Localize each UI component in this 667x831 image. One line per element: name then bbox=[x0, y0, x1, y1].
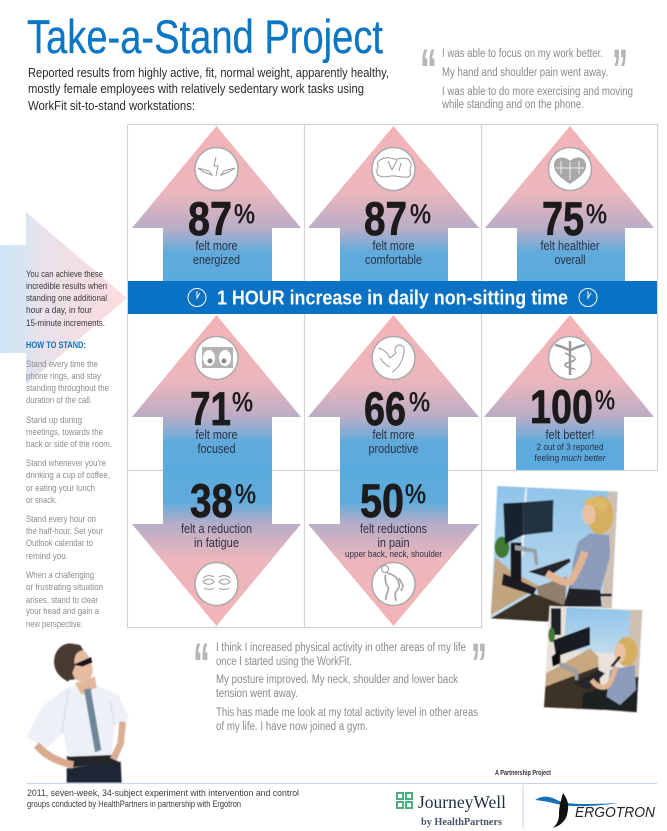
bottom quote: once I started using the WorkFit. bbox=[216, 656, 352, 668]
label: felt healthier bbox=[540, 238, 600, 253]
icon: clock left bbox=[188, 288, 206, 306]
footer rule bbox=[27, 782, 657, 784]
stat: % bbox=[232, 387, 253, 417]
side tips: duration of the call. bbox=[26, 395, 92, 406]
side tips: drinking a cup of coffee, bbox=[26, 470, 110, 481]
footer note: 2011, seven-week, 34-subject experiment with intervention and control bbox=[27, 788, 299, 799]
side tips: new perspective. bbox=[26, 619, 83, 630]
top quote: “ bbox=[420, 38, 437, 103]
stat: % bbox=[595, 385, 615, 415]
side tips: your head and gain a bbox=[26, 606, 100, 617]
top quote: My hand and shoulder pain went away. bbox=[442, 67, 608, 79]
label: energized bbox=[193, 252, 240, 267]
label: felt more bbox=[372, 238, 414, 253]
label: in fatigue bbox=[194, 535, 239, 550]
panel: left arrow bbox=[0, 212, 127, 385]
stat: 87 bbox=[188, 192, 232, 245]
photo: man looking up bbox=[27, 643, 129, 783]
side tips: When a challenging bbox=[26, 570, 94, 581]
label bbox=[345, 521, 442, 560]
stat: % bbox=[405, 479, 426, 509]
logo: Ergotron bbox=[535, 793, 655, 828]
partnership label: A Partnership Project bbox=[495, 770, 552, 777]
label bbox=[181, 521, 252, 550]
side text: intro: incredible results when bbox=[26, 281, 107, 292]
banner bbox=[128, 281, 657, 314]
side text: intro bbox=[26, 269, 107, 329]
label bbox=[368, 427, 418, 456]
side text: intro: standing one additional bbox=[26, 293, 107, 304]
title: Take-a-Stand Project bbox=[27, 10, 383, 63]
bottom quote: “ bbox=[193, 632, 210, 697]
stat: 75 bbox=[542, 192, 584, 245]
arrow: healthier bbox=[485, 126, 654, 281]
results grid bbox=[128, 124, 658, 628]
label: felt reductions bbox=[360, 521, 427, 536]
icon: caduceus bbox=[548, 336, 592, 380]
icon: JourneyWell mark bbox=[396, 792, 413, 809]
label bbox=[365, 238, 422, 267]
stat: 87 bbox=[364, 192, 407, 245]
label: felt more bbox=[196, 238, 238, 253]
label bbox=[534, 427, 606, 464]
icon: heart bbox=[548, 148, 592, 190]
side text: intro: 15-minute increments. bbox=[26, 318, 105, 329]
arrow: energized bbox=[132, 126, 301, 281]
side tips: phone rings, and stay bbox=[26, 371, 101, 382]
intro text: WorkFit sit-to-stand workstations: bbox=[28, 99, 195, 113]
bottom quote: tension went away. bbox=[216, 688, 298, 700]
banner text: 1 HOUR increase in daily non-sitting time bbox=[217, 288, 568, 310]
label: overall bbox=[554, 252, 586, 267]
side text: intro: hour a day, in four bbox=[26, 305, 92, 316]
icon: muscle arm bbox=[372, 336, 415, 380]
intro text: mostly female employees with relatively sedentary work tasks using bbox=[28, 82, 364, 96]
stat: 100 bbox=[530, 380, 593, 433]
side tips: or eating your lunch bbox=[26, 483, 95, 494]
side tips: arises, stand to clear bbox=[26, 595, 98, 606]
icon: back pain figure bbox=[372, 562, 415, 606]
side tips: or frustrating situation bbox=[26, 582, 103, 593]
side tips: Stand every hour on bbox=[26, 514, 96, 525]
arrow: felt better bbox=[484, 315, 654, 470]
bottom quote: of my life. I have now joined a gym. bbox=[216, 721, 368, 733]
stat: % bbox=[234, 199, 255, 229]
divider bbox=[522, 785, 524, 828]
label: felt a reduction bbox=[181, 521, 252, 536]
side tips: Stand whenever you're bbox=[26, 458, 106, 469]
logo: JourneyWell: JourneyWell bbox=[418, 792, 506, 812]
intro text: Reported results from highly active, fit, normal weight, apparently healthy, bbox=[28, 66, 389, 80]
top quote: ” bbox=[612, 38, 628, 103]
side tips: or snack. bbox=[26, 495, 57, 506]
top quote: I was able to focus on my work better. bbox=[442, 48, 603, 60]
label: felt better! bbox=[546, 427, 594, 442]
footer note bbox=[27, 788, 299, 810]
side tips: standing throughout the bbox=[26, 383, 109, 394]
stat: % bbox=[410, 199, 431, 229]
bottom quote: My posture improved. My neck, shoulder and lower back bbox=[216, 674, 458, 686]
icon: energy bolts bbox=[195, 148, 238, 190]
side heading: HOW TO STAND: bbox=[26, 340, 86, 351]
side tips: the half-hour. Set your bbox=[26, 526, 103, 537]
label: 2 out of 3 reported bbox=[536, 442, 604, 453]
stat: 38 bbox=[190, 474, 233, 527]
arrow: productive and pain bbox=[308, 315, 479, 626]
label: focused bbox=[198, 441, 236, 456]
side tips: Stand up during bbox=[26, 415, 82, 426]
label: felt more bbox=[372, 427, 414, 442]
label: feeling much better bbox=[534, 453, 606, 464]
stat: % bbox=[586, 199, 607, 229]
label bbox=[193, 238, 240, 267]
icon: focused eyes bbox=[195, 336, 238, 380]
side tips: meetings, towards the bbox=[26, 427, 103, 438]
logo: JourneyWell bbox=[396, 792, 506, 828]
top quote bbox=[420, 38, 633, 111]
bottom quote bbox=[193, 632, 487, 733]
side tips: back or side of the room. bbox=[26, 439, 112, 450]
logo: JourneyWell: by HealthPartners bbox=[421, 816, 503, 828]
photo: woman seated bbox=[544, 606, 642, 712]
icon: clock right bbox=[579, 288, 597, 306]
logo: Ergotron: ERGOTRON bbox=[575, 804, 655, 821]
side tips: Stand every time the bbox=[26, 359, 98, 370]
arrow: comfortable bbox=[308, 126, 479, 281]
side tips bbox=[26, 359, 112, 630]
side tips: Outlook calendar to bbox=[26, 538, 93, 549]
footer note: groups conducted by HealthPartners in partnership with Ergotron bbox=[27, 799, 241, 810]
stat: 71 bbox=[190, 382, 231, 435]
icon: pillow bbox=[372, 148, 415, 190]
bottom quote: This has made me look at my total activity level in other areas bbox=[216, 707, 478, 719]
label: comfortable bbox=[365, 252, 422, 267]
top quote: while standing and on the phone. bbox=[441, 99, 584, 111]
label: upper back, neck, shoulder bbox=[345, 549, 442, 560]
side tips: remind you. bbox=[26, 551, 68, 562]
label bbox=[196, 427, 238, 456]
bottom quote: I think I increased physical activity in other areas of my life bbox=[216, 642, 466, 654]
stat: % bbox=[409, 387, 430, 417]
label bbox=[540, 238, 600, 267]
label: productive bbox=[368, 441, 418, 456]
top quote: I was able to do more exercising and moving bbox=[442, 86, 633, 98]
label: felt more bbox=[196, 427, 238, 442]
icon: tired eyes bbox=[195, 562, 238, 606]
intro text bbox=[28, 66, 389, 113]
stat: 66 bbox=[364, 382, 406, 435]
label: in pain bbox=[378, 535, 410, 550]
stat: 50 bbox=[360, 474, 404, 527]
side text: intro: You can achieve these bbox=[26, 269, 103, 280]
bottom quote: ” bbox=[471, 632, 487, 697]
photo: woman standing bbox=[491, 486, 618, 622]
stat: % bbox=[235, 479, 256, 509]
arrow: focused and fatigue bbox=[132, 315, 301, 626]
